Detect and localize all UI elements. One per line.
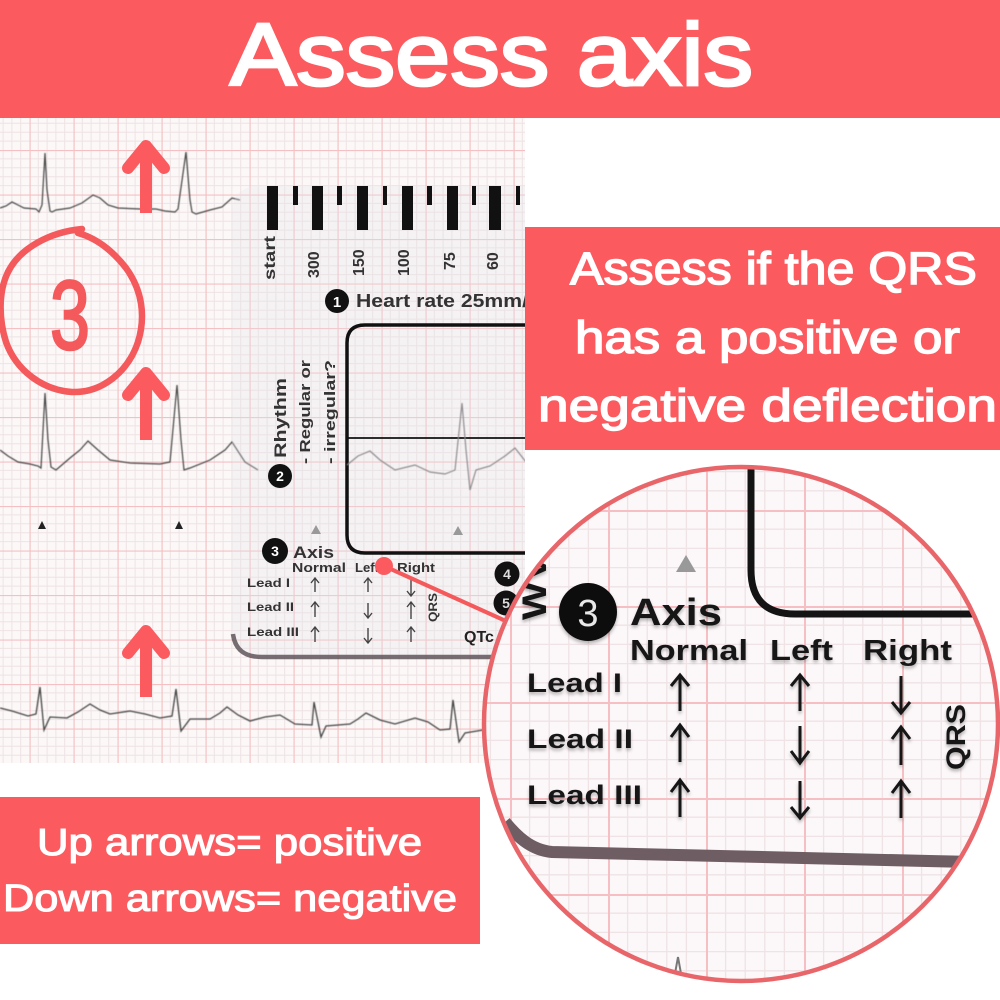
ruler scale labels: start [262,235,279,280]
magnified axis table: Normal [630,635,748,667]
magnified marker [676,555,696,572]
step 3: axis table: Lead I [247,578,290,590]
title: Assess axis [230,5,753,104]
arrow: positive deflection middle [128,373,164,440]
header banner [0,0,1000,118]
callout: arrow legend: Up arrows= positive [37,822,422,864]
step 2: rhythm: Rhythm [271,378,290,458]
ruler scale labels: 60 [485,252,502,270]
step 3: axis table: Axis [293,543,334,562]
hand-drawn circled step number 3: 3 [50,260,90,370]
steps 4 and 5 [464,562,520,646]
ECG trace seen through ruler [347,403,526,490]
ECG trace: bottom strip [0,687,483,742]
step 3: axis table: QRS [428,593,440,622]
ruler scale labels [262,235,502,280]
step 3: axis table [247,538,440,643]
magnified ECG tip [674,956,682,972]
callout: arrow legend: Down arrows= negative [3,878,457,920]
callout: assess QRS deflection: has a positive or [575,312,960,363]
magnifier: zoomed axis table [480,460,1000,990]
step 1: heart rate [325,289,528,313]
ruler scale labels: 75 [442,252,459,270]
step 3: axis table: Lead III [247,627,299,639]
callout: assess QRS deflection: Assess if the QRS [570,243,977,294]
step 1: heart rate: 1 [333,294,341,311]
step 2: rhythm: 2 [276,468,284,484]
ruler scale bars [267,186,520,230]
magnified box corner [751,462,985,614]
step 3: axis table: 3 [271,543,279,559]
step 3: axis table: Lead II [247,602,294,614]
step 3: axis table: Left [355,561,380,575]
connector: dot and leader line to magnifier [375,557,508,622]
ECG trace: middle strip [0,385,258,470]
steps 4 and 5: 4 [503,566,511,582]
magnified axis table: QRS [941,704,971,770]
magnified axis table: Axis [630,592,722,634]
step 3: axis table: Normal [292,561,346,575]
magnified axis table: Left [770,635,833,667]
ruler scale labels: 150 [351,249,368,276]
steps 4 and 5: QTc [464,629,494,646]
step 2: rhythm: - Regular or [297,360,314,464]
ruler scale labels: 100 [396,249,413,276]
callout: assess QRS deflection [525,227,1000,450]
step 2: rhythm [268,360,339,488]
magnified axis table: Lead I [527,668,622,698]
callout: assess QRS deflection: negative deflection [538,380,997,431]
magnified arrows [671,675,910,818]
magnified axis table: WV [516,554,554,620]
magnified ruler edge [505,822,970,862]
magnified axis table: Lead II [527,724,633,754]
ruler scale labels: 300 [306,251,323,278]
markers through ruler [311,525,463,535]
arrow: positive deflection bottom [128,631,164,697]
step 1: heart rate: Heart rate 25mm/ [356,291,528,311]
step 3: axis table: Right [397,561,436,575]
magnified axis table: Lead III [527,780,642,810]
hand-drawn circled step number 3 [1,229,142,392]
callout: arrow legend [0,797,480,944]
magnified axis table: Right [863,635,952,667]
steps 4 and 5: 5 [502,595,510,611]
rhythm strip box [347,325,526,553]
markers: small triangles [38,521,183,529]
arrow: positive deflection top [128,146,164,213]
magnified axis table: 3 [577,593,599,635]
ruler card [232,186,552,658]
ECG trace: top strip [0,152,240,214]
magnified axis table [516,554,971,810]
photo: ECG paper with ruler [0,118,552,763]
step 2: rhythm: - irregular? [322,360,339,464]
